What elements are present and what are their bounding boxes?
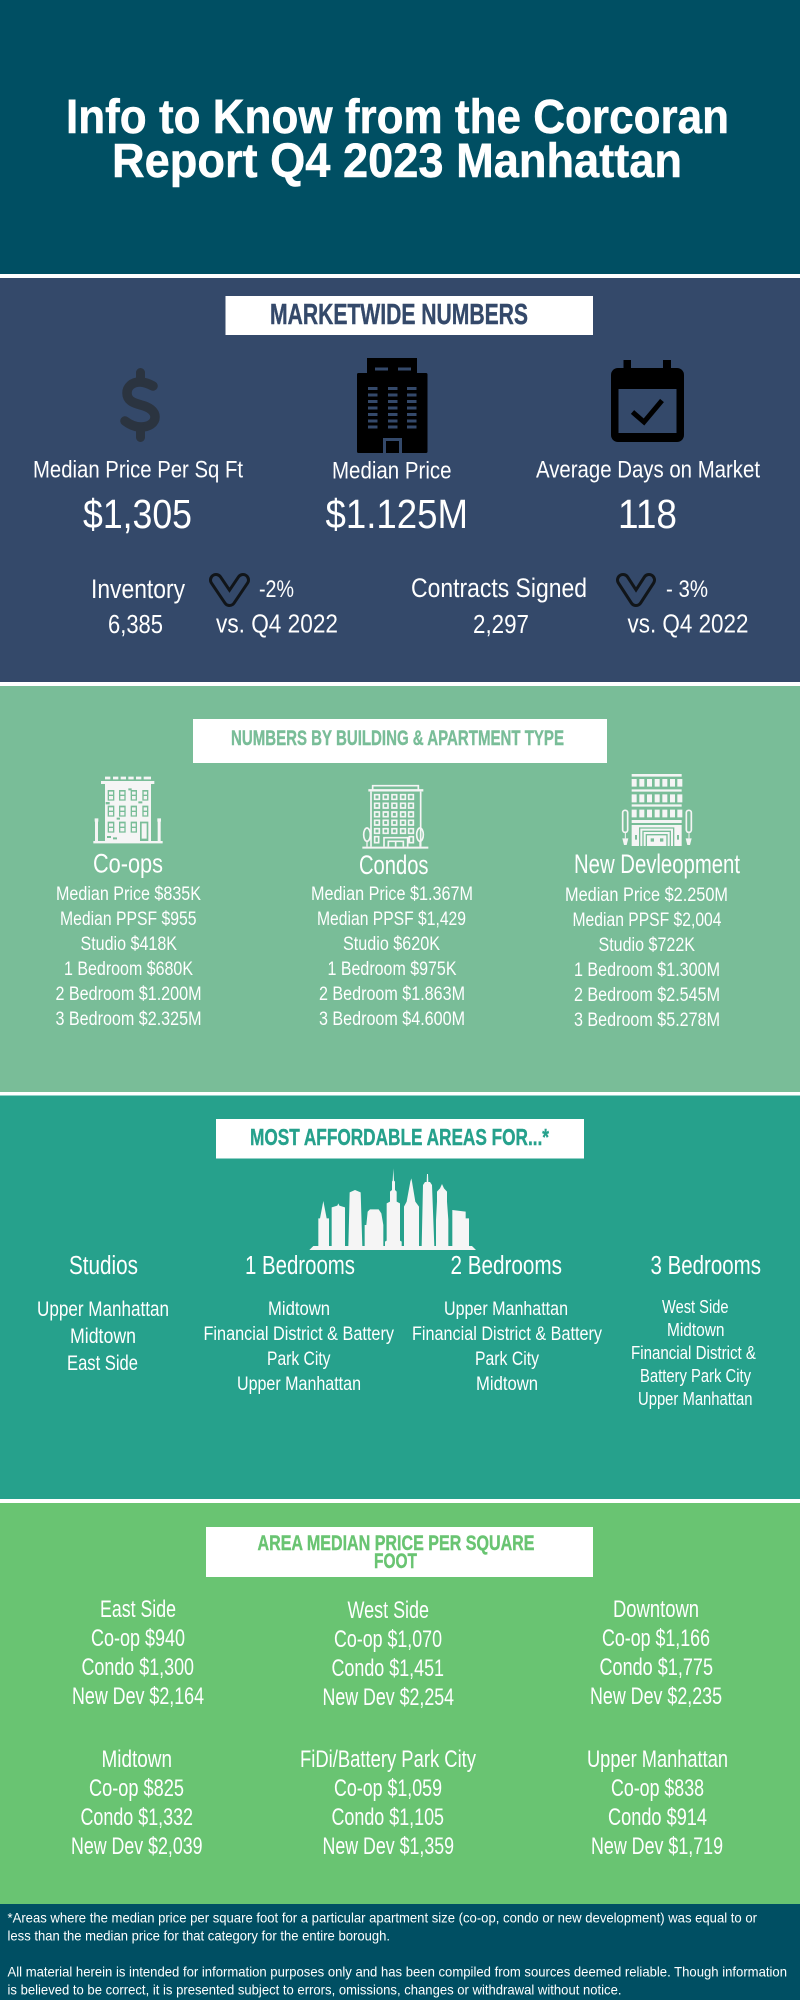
text block: 3 bedrooms: Midtown: [667, 1320, 724, 1340]
icon: co-op building: [93, 777, 163, 843]
change: contracts vs Q4 2022: [628, 576, 748, 638]
stat: inventory: Inventory: [91, 574, 186, 604]
text block: new development: 3 Bedroom $5.278M: [574, 1010, 720, 1031]
stat: inventory: [91, 574, 186, 639]
text block: upper manhattan: [587, 1746, 728, 1860]
text block: west side: West Side: [348, 1597, 429, 1624]
text block: west side: New Dev $2,254: [322, 1684, 454, 1711]
text block: east side: [72, 1596, 204, 1710]
text block: co-ops: Median Price $835K: [56, 884, 201, 905]
text block: 1 bedrooms: 1 Bedrooms: [245, 1252, 355, 1280]
stat: inventory: 6,385: [108, 611, 163, 639]
stat: contracts signed: [411, 573, 587, 639]
heading: area median price per square foot: FOOT: [374, 1550, 417, 1573]
text block: studios: Studios: [69, 1252, 138, 1280]
stat: average days on market: 118: [618, 491, 677, 537]
text block: new development: Median Price $2.250M: [565, 885, 728, 906]
text block: 3 bedrooms: [631, 1252, 761, 1409]
text block: fidi battery park city: New Dev $1,359: [322, 1833, 454, 1860]
text block: condos: 3 Bedroom $4.600M: [319, 1009, 465, 1030]
heading: marketwide numbers: [226, 296, 593, 335]
text block: 2 bedrooms: 2 Bedrooms: [450, 1252, 562, 1280]
footnote: affordable areas definition: [8, 1910, 757, 1944]
panel: numbers by building and apartment type: [0, 686, 800, 1092]
text block: new development: Median PPSF $2,004: [572, 910, 722, 931]
text block: studios: [37, 1252, 169, 1375]
stat: median price: $1.125M: [326, 491, 468, 537]
stat: average days on market: Average Days on Market: [536, 456, 760, 484]
footnote: affordable areas definition: less than the median price for that category for the entire borough.: [8, 1928, 390, 1944]
text block: co-ops: Median PPSF $955: [60, 909, 196, 930]
text block: midtown: New Dev $2,039: [71, 1833, 202, 1860]
title: [66, 91, 729, 188]
text block: west side: Condo $1,451: [332, 1655, 444, 1682]
text block: co-ops: 2 Bedroom $1.200M: [56, 984, 202, 1005]
text block: 2 bedrooms: Upper Manhattan: [444, 1299, 568, 1320]
text block: east side: East Side: [100, 1596, 176, 1623]
text block: 3 bedrooms: West Side: [662, 1297, 728, 1317]
icon: dollar sign: [125, 372, 155, 438]
text block: downtown: New Dev $2,235: [590, 1683, 722, 1710]
text block: new development: [565, 849, 740, 1031]
heading: most affordable areas: [216, 1119, 584, 1158]
text block: downtown: Co-op $1,166: [602, 1625, 710, 1652]
stat: median price: [326, 458, 468, 537]
footnote: affordable areas definition: *Areas where the median price per square foot for a particular apartment size (co-op, condo or new development) was equal to or: [8, 1910, 757, 1926]
heading: numbers by building type: NUMBERS BY BUILDING & APARTMENT TYPE: [231, 727, 564, 750]
stat: contracts signed: 2,297: [473, 611, 529, 639]
footnote: disclaimer: [8, 1964, 787, 1998]
text block: studios: Midtown: [70, 1325, 136, 1348]
text block: new development: 1 Bedroom $1.300M: [574, 960, 720, 981]
icon: office building: [357, 358, 428, 453]
text block: studios: Upper Manhattan: [37, 1298, 169, 1321]
text block: west side: Co-op $1,070: [334, 1626, 442, 1653]
stat: median price per sq ft: $1,305: [83, 491, 192, 537]
heading: marketwide numbers: MARKETWIDE NUMBERS: [270, 299, 528, 331]
text block: fidi battery park city: Co-op $1,059: [334, 1775, 442, 1802]
text block: upper manhattan: New Dev $1,719: [591, 1833, 723, 1860]
icon: condo building: [362, 786, 428, 848]
icon: calendar with check: [611, 360, 684, 442]
text block: upper manhattan: Co-op $838: [611, 1775, 704, 1802]
text block: 3 bedrooms: Financial District &: [631, 1343, 756, 1363]
text block: co-ops: Co-ops: [93, 849, 163, 879]
text block: east side: Condo $1,300: [82, 1654, 194, 1681]
panel: footer: [0, 1904, 800, 2000]
icon: down chevron inventory: [216, 580, 243, 600]
text block: condos: 2 Bedroom $1.863M: [319, 984, 465, 1005]
stat: average days on market: [536, 456, 760, 537]
text block: west side: [322, 1597, 454, 1711]
text block: studios: East Side: [67, 1352, 138, 1375]
text block: midtown: Midtown: [102, 1746, 172, 1773]
heading: numbers by building type: [193, 719, 607, 763]
text block: upper manhattan: Upper Manhattan: [587, 1746, 728, 1773]
text block: new development: 2 Bedroom $2.545M: [574, 985, 720, 1006]
stat: median price per sq ft: [33, 456, 243, 537]
text block: 1 bedrooms: Park City: [267, 1349, 331, 1370]
title: Report Q4 2023 Manhattan: [112, 135, 682, 188]
heading: most affordable areas: MOST AFFORDABLE AREAS FOR...*: [250, 1124, 549, 1150]
text block: 2 bedrooms: Midtown: [476, 1374, 538, 1395]
text block: new development: Studio $722K: [598, 935, 695, 956]
text block: co-ops: Studio $418K: [80, 934, 177, 955]
footnote: disclaimer: is believed to be correct, it is presented subject to errors, omissions, changes or withdrawal without notice.: [8, 1982, 622, 1998]
text block: co-ops: [56, 849, 202, 1030]
icon: city skyline: [309, 1168, 476, 1250]
text block: downtown: Downtown: [613, 1596, 699, 1623]
text block: upper manhattan: Condo $914: [608, 1804, 707, 1831]
change: contracts vs Q4 2022: - 3%: [666, 576, 708, 603]
title: Info to Know from the Corcoran: [66, 91, 729, 144]
heading: area median price per square foot: [206, 1527, 593, 1577]
text block: new development: New Devleopment: [574, 849, 740, 879]
stat: contracts signed: Contracts Signed: [411, 573, 587, 603]
panel: marketwide numbers: [0, 278, 800, 682]
change: inventory vs Q4 2022: vs. Q4 2022: [216, 610, 338, 638]
text block: 2 bedrooms: [412, 1252, 602, 1395]
text block: midtown: Co-op $825: [89, 1775, 184, 1802]
text block: 1 bedrooms: Midtown: [268, 1299, 330, 1320]
stat: median price: Median Price: [332, 458, 452, 484]
text block: midtown: [71, 1746, 202, 1860]
text block: condos: Studio $620K: [343, 934, 440, 955]
text block: 1 bedrooms: Financial District & Battery: [204, 1324, 394, 1345]
panel: area median price per square foot: [0, 1503, 800, 1904]
text block: condos: 1 Bedroom $975K: [328, 959, 457, 980]
text block: fidi battery park city: FiDi/Battery Park City: [300, 1746, 476, 1773]
text block: condos: Median Price $1.367M: [311, 884, 473, 905]
text block: condos: [311, 850, 473, 1030]
text block: downtown: Condo $1,775: [600, 1654, 713, 1681]
text block: co-ops: 3 Bedroom $2.325M: [56, 1009, 202, 1030]
panel: most affordable areas: [0, 1096, 800, 1499]
text block: 1 bedrooms: Upper Manhattan: [237, 1374, 361, 1395]
text block: 3 bedrooms: Upper Manhattan: [638, 1389, 752, 1409]
text block: condos: Median PPSF $1,429: [317, 909, 466, 930]
text block: condos: Condos: [359, 850, 428, 880]
text block: 2 bedrooms: Park City: [475, 1349, 539, 1370]
text block: east side: New Dev $2,164: [72, 1683, 204, 1710]
icon: new development building: [622, 774, 692, 846]
text block: 3 bedrooms: Battery Park City: [640, 1366, 751, 1386]
text block: downtown: [590, 1596, 722, 1710]
heading: area median price per square foot: AREA MEDIAN PRICE PER SQUARE: [258, 1532, 534, 1555]
text block: 2 bedrooms: Financial District & Battery: [412, 1324, 602, 1345]
change: inventory vs Q4 2022: [216, 576, 338, 638]
icon: down chevron contracts: [623, 580, 649, 600]
panel: header: [0, 0, 800, 274]
text block: midtown: Condo $1,332: [80, 1804, 193, 1831]
change: inventory vs Q4 2022: -2%: [259, 576, 294, 603]
text block: 1 bedrooms: [204, 1252, 394, 1395]
text block: east side: Co-op $940: [91, 1625, 185, 1652]
text block: 3 bedrooms: 3 Bedrooms: [650, 1252, 761, 1280]
change: contracts vs Q4 2022: vs. Q4 2022: [628, 610, 748, 638]
text block: fidi battery park city: Condo $1,105: [332, 1804, 444, 1831]
stat: median price per sq ft: Median Price Per Sq Ft: [33, 456, 243, 484]
text block: co-ops: 1 Bedroom $680K: [64, 959, 193, 980]
text block: fidi battery park city: [300, 1746, 476, 1860]
